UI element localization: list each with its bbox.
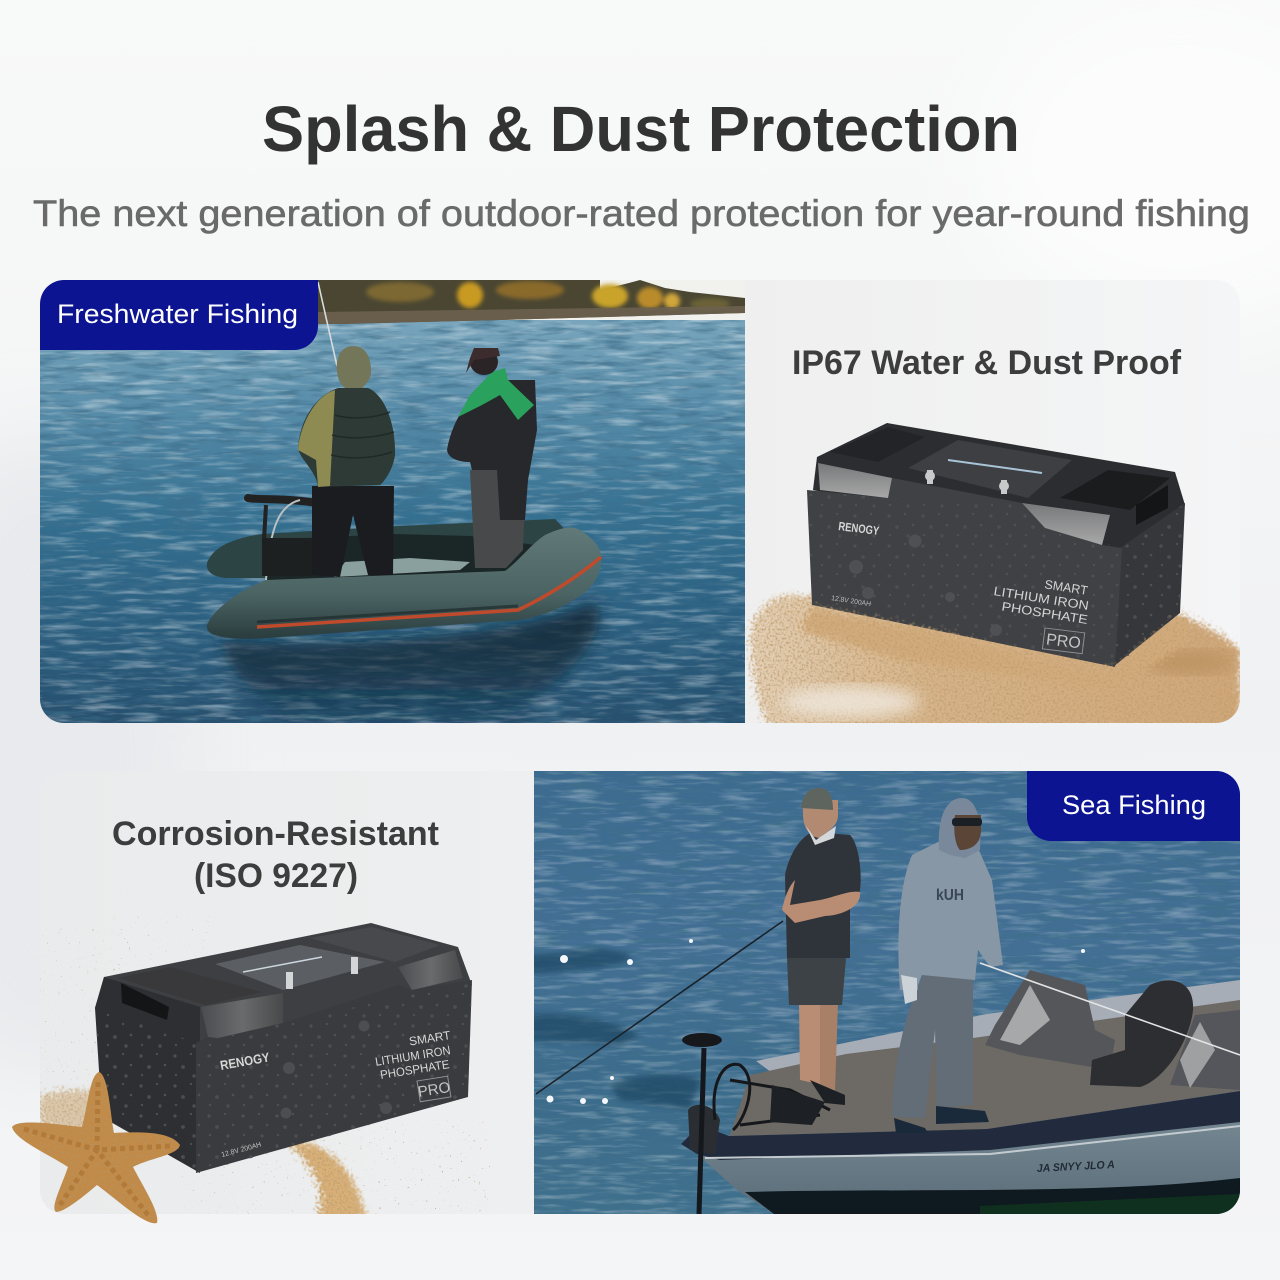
person: man in hoodie xyxy=(892,798,1003,1133)
right panel background xyxy=(1102,280,1138,282)
sand under battery xyxy=(751,595,1240,730)
heading: IP67: IP67 Water & Dust Proof xyxy=(792,344,1182,382)
sun glints xyxy=(546,939,1085,1104)
panel: freshwater fishing and IP67 xyxy=(40,280,1240,730)
battery top xyxy=(813,423,1185,560)
vents xyxy=(1060,470,1170,510)
hull xyxy=(681,1091,1240,1214)
far shore with autumn trees xyxy=(318,280,745,324)
title: Splash & Dust Protection xyxy=(262,93,1020,165)
battery name xyxy=(994,580,1088,624)
terminals xyxy=(925,470,1009,494)
photo: sea fishing xyxy=(520,771,1240,1214)
tag: freshwater fishing: Freshwater Fishing xyxy=(57,299,298,329)
rear tube xyxy=(207,519,570,578)
trolling motor xyxy=(699,1048,704,1214)
handles xyxy=(818,463,892,498)
icon: starfish xyxy=(12,1072,180,1223)
seats xyxy=(985,970,1240,1090)
battery name: LITHIUM IRON xyxy=(374,1043,451,1069)
left panel background xyxy=(40,1124,290,1214)
slot xyxy=(121,983,169,1020)
gunwale xyxy=(756,980,1240,1078)
battery name: SMART xyxy=(408,1028,452,1049)
hull lettering: JA SNYY JLO A xyxy=(1037,1159,1115,1175)
PRO badge: PRO xyxy=(1045,631,1082,652)
battery name: PHOSPHATE xyxy=(1001,600,1089,627)
heading: corrosion resistant: Corrosion-Resistant xyxy=(112,815,439,853)
deck xyxy=(729,1000,1240,1138)
motor mount xyxy=(688,1105,720,1155)
terminals xyxy=(286,957,358,989)
tag: sea fishing xyxy=(1027,771,1240,841)
person: right angler xyxy=(447,348,537,568)
battery name: SMART xyxy=(1044,577,1089,598)
battery side xyxy=(1113,503,1185,667)
battery name xyxy=(374,1028,452,1082)
dark wave patches xyxy=(520,949,700,1110)
heading: corrosion resistant: (ISO 9227) xyxy=(194,857,358,895)
person: man with cap xyxy=(782,788,861,1105)
fishing rod xyxy=(318,282,337,366)
battery left side xyxy=(95,977,200,1173)
red stripe xyxy=(257,557,601,627)
battery rating: 12.8V 200AH xyxy=(221,1142,262,1159)
fishing rod xyxy=(536,921,783,1094)
tag: sea fishing: Sea Fishing xyxy=(1062,790,1206,820)
heading: corrosion resistant xyxy=(112,815,439,895)
near tube xyxy=(207,528,601,639)
battery logo: RENOGY xyxy=(219,1049,271,1073)
battery logo: RENOGY xyxy=(838,519,880,538)
inflatable boat xyxy=(207,498,601,639)
scattered sand speckle xyxy=(40,915,490,1214)
handles xyxy=(201,993,283,1038)
trolling motor xyxy=(248,498,316,580)
battery front xyxy=(807,478,1122,667)
bass boat xyxy=(681,970,1240,1214)
subtitle: The next generation of outdoor-rated protection for year-round fishing xyxy=(33,193,1250,234)
panel: corrosion resistant and sea fishing xyxy=(39,771,1240,1220)
second fishing rod xyxy=(980,963,1240,1055)
person: left angler xyxy=(298,346,395,577)
photo: freshwater fishing xyxy=(40,280,745,723)
battery name: LITHIUM IRON xyxy=(993,584,1090,613)
battery name: PHOSPHATE xyxy=(379,1057,450,1082)
battery top xyxy=(95,923,472,1043)
sand heap behind battery xyxy=(286,1142,366,1220)
tag: freshwater fishing xyxy=(40,280,318,350)
boat reflection xyxy=(222,602,599,723)
battery rating: 12.8V 200AH xyxy=(831,595,871,608)
battery front xyxy=(196,980,472,1173)
PRO badge: PRO xyxy=(417,1079,451,1101)
battery with sand xyxy=(95,923,472,1173)
person: man in hoodie: kUH xyxy=(936,887,964,904)
cables xyxy=(714,1064,830,1130)
sand in front of battery xyxy=(800,607,1190,690)
boat interior xyxy=(262,534,535,582)
battery with water droplets xyxy=(807,423,1185,667)
